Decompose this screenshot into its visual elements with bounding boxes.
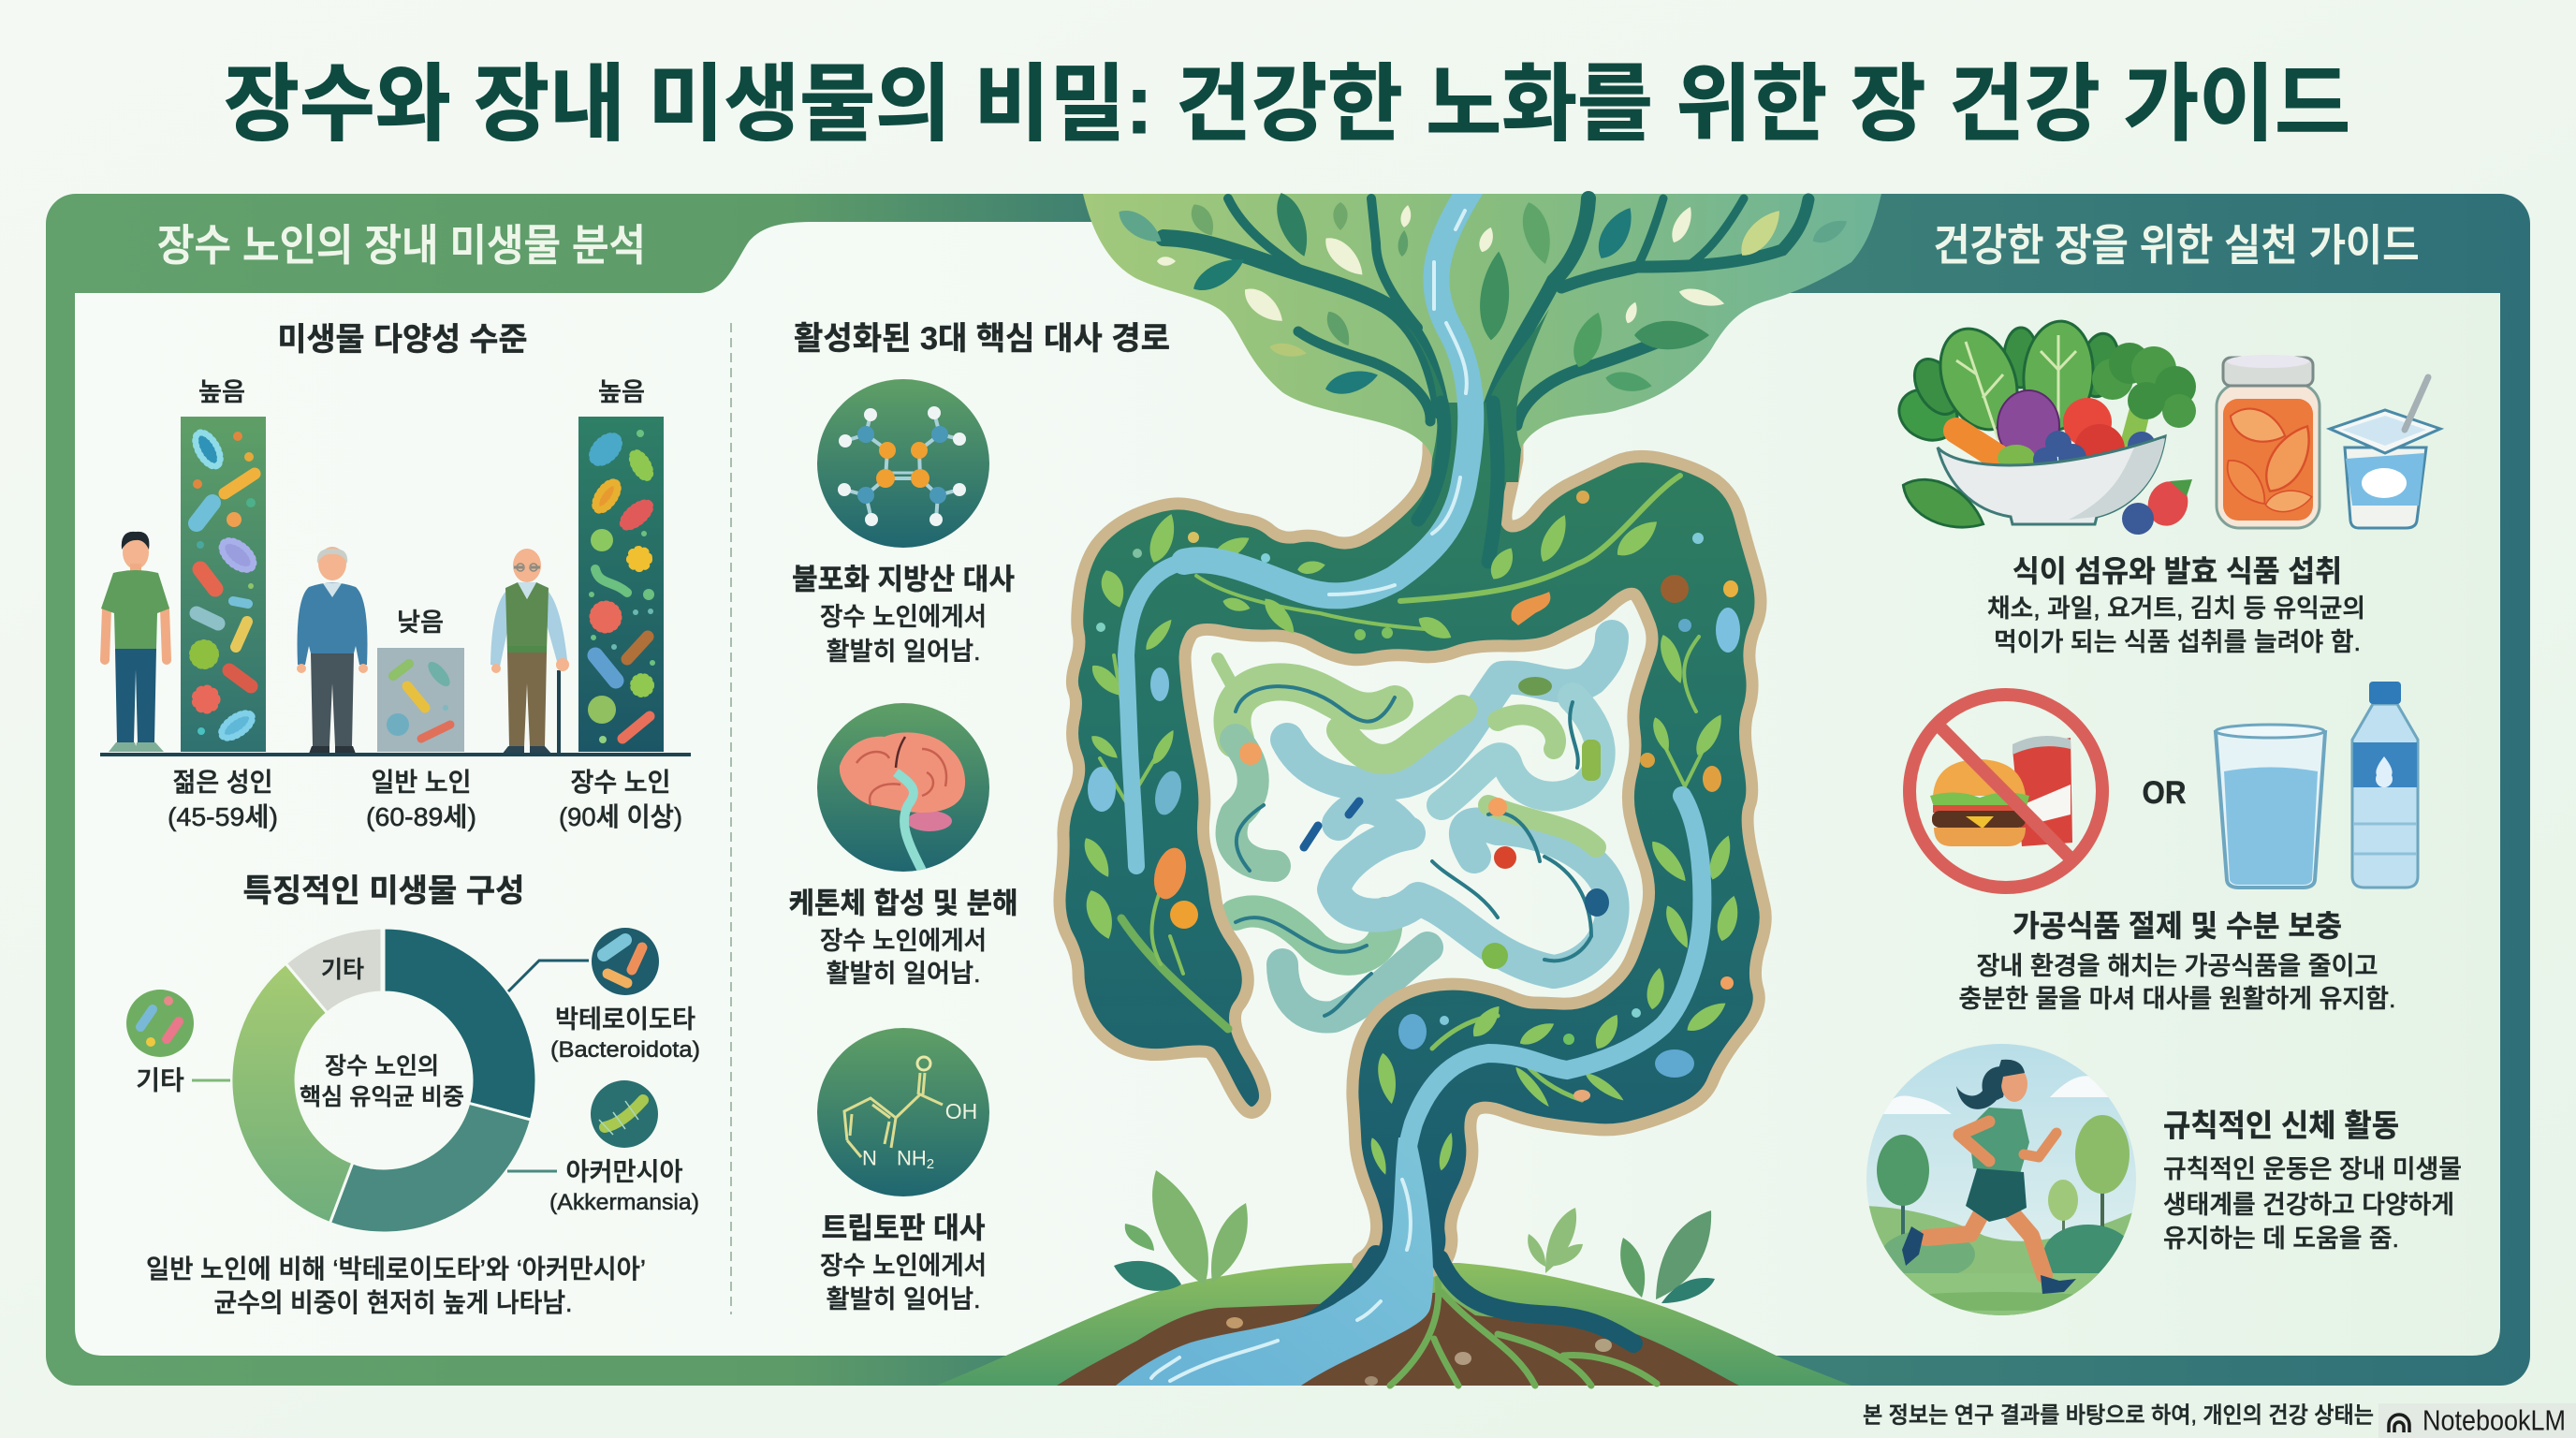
footer note: 본 정보는 연구 결과를 바탕으로 하여, 개인의 건강 상태는 — [1863, 1402, 2374, 1429]
icon: yogurt — [2330, 377, 2440, 528]
heading: fiber and fermented foods: 식이 섬유와 발효 식품 섭취 — [2012, 554, 2342, 588]
panel: three core metabolic pathways — [788, 321, 1170, 1313]
plants right — [1528, 1208, 1715, 1303]
person: young adult — [101, 532, 169, 752]
description: tryptophan: 장수 노인에게서 — [820, 1252, 987, 1280]
heading: cut processed foods: 가공식품 절제 및 수분 보충 — [2012, 909, 2342, 943]
icon: tryptophan structure: NH — [897, 1146, 927, 1170]
segment: Bacteroidota — [384, 928, 536, 1120]
label: ketone: 케톤체 합성 및 분해 — [788, 888, 1018, 919]
axis label: young adults: 젊은 성인 — [172, 768, 273, 796]
soil — [1057, 1292, 1739, 1386]
right panel header: 건강한 장을 위한 실천 가이드 — [1934, 221, 2419, 270]
axis label: general elderly: (60-89세) — [366, 801, 476, 831]
gut vines and leaves — [1078, 476, 1743, 1177]
hill — [936, 1263, 1852, 1386]
description: tryptophan: 활발히 일어남. — [826, 1285, 981, 1313]
illustration: gut tree — [936, 187, 1881, 1386]
plants left — [1114, 1170, 1248, 1291]
label: Bacteroidota: (Bacteroidota) — [550, 1037, 700, 1062]
bar: young adults — [181, 417, 266, 752]
label: tryptophan: 트립토판 대사 — [822, 1211, 985, 1245]
bar: longevity elderly — [578, 417, 664, 752]
icon: water bottle — [2352, 682, 2418, 888]
trunk upper — [1404, 309, 1549, 482]
person: longevity elderly — [490, 549, 569, 755]
label: other: 기타 — [136, 1065, 184, 1095]
label: high: 높음 — [198, 378, 245, 406]
segment: other grey — [285, 928, 382, 1013]
label: high: 높음 — [598, 378, 645, 406]
donut centre label: 핵심 유익균 비중 — [300, 1084, 464, 1110]
label: Akkermansia: (Akkermansia) — [549, 1189, 699, 1215]
segment: Akkermansia — [329, 1103, 531, 1233]
person: general elderly — [297, 547, 368, 754]
description: ketone: 장수 노인에게서 — [820, 927, 987, 955]
pebbles and roots — [1226, 1279, 1657, 1386]
heading: pathways: 활성화된 3대 핵심 대사 경로 — [794, 321, 1170, 357]
axis label: general elderly: 일반 노인 — [371, 768, 472, 796]
label: Akkermansia: 아커만시아 — [565, 1158, 683, 1186]
label: Bacteroidota: 박테로이도타 — [555, 1005, 695, 1034]
icon: brain ketone bodies — [817, 703, 989, 872]
icon: other microbes — [126, 990, 194, 1057]
crown leaves — [1113, 189, 1852, 399]
small intestine — [1218, 637, 1613, 1018]
label: or: OR — [2142, 775, 2187, 811]
donut label: other: 기타 — [321, 957, 364, 983]
trunk dark strands — [1418, 403, 1498, 562]
axis label: longevity elderly: (90세 이상) — [559, 801, 682, 831]
donut centre label: 장수 노인의 — [325, 1053, 439, 1079]
description: fatty acid: 장수 노인에게서 — [820, 603, 987, 631]
icon: salad bowl — [1891, 317, 2196, 541]
axis label: longevity elderly: 장수 노인 — [571, 768, 670, 796]
label: low: 낮음 — [397, 609, 444, 637]
label: fatty acid: 불포화 지방산 대사 — [792, 564, 1015, 595]
icon: tryptophan structure — [817, 1028, 989, 1196]
description: processed foods: 충분한 물을 마셔 대사를 원활하게 유지함. — [1958, 985, 2396, 1013]
baseline — [100, 753, 691, 756]
icon: Bacteroidota — [592, 928, 659, 995]
large intestine trunk — [1060, 445, 1765, 1273]
heading: composition: 특징적인 미생물 구성 — [243, 873, 524, 909]
panel: practice guide — [1863, 221, 2462, 1320]
icon: unsaturated fatty acid molecule — [817, 379, 989, 548]
title: 장수와 장내 미생물의 비밀: 건강한 노화를 위한 장 건강 가이드 — [224, 58, 2350, 152]
axis label: young adults: (45-59세) — [168, 801, 278, 831]
dark root band — [1287, 1255, 1633, 1343]
tree crown — [1083, 194, 1881, 459]
icon: no processed food — [1910, 695, 2102, 888]
icon: tryptophan structure: OH — [945, 1099, 977, 1123]
water stream — [1126, 187, 1702, 1184]
caption: composition: 일반 노인에 비해 ‘박테로이도타’와 ‘아커만시아’ — [146, 1255, 646, 1283]
icon: kimchi jar — [2217, 355, 2321, 528]
bar: general elderly — [377, 648, 464, 752]
leader: Akkermansia — [507, 1170, 557, 1172]
description: processed foods: 장내 환경을 해치는 가공식품을 줄이고 — [1977, 952, 2378, 980]
donut chart — [231, 928, 536, 1233]
icon: Akkermansia — [591, 1080, 658, 1148]
icon: tryptophan structure: 2 — [927, 1155, 934, 1172]
panel: longevity microbiome analysis — [100, 221, 700, 1316]
icon: tryptophan structure: N — [862, 1146, 877, 1170]
leafy greens — [1891, 317, 2124, 449]
diversity bar chart — [100, 378, 691, 831]
icon: runner — [1863, 1044, 2144, 1320]
leader: other — [192, 1078, 230, 1082]
crown branches — [1164, 198, 1808, 425]
description: fiber: 먹이가 되는 식품 섭취를 늘려야 함. — [1994, 628, 2361, 656]
description: physical activity: 생태계를 건강하고 다양하게 — [2163, 1191, 2454, 1219]
segment: other green — [231, 963, 353, 1223]
description: physical activity: 유지하는 데 도움을 줌. — [2163, 1225, 2399, 1253]
left panel header: 장수 노인의 장내 미생물 분석 — [157, 221, 646, 270]
leader: Bacteroidota — [508, 961, 589, 991]
panel frame — [46, 194, 2530, 1386]
caption: composition: 균수의 비중이 현저히 높게 나타남. — [213, 1288, 573, 1316]
bowl — [1938, 436, 2165, 524]
broccoli — [2092, 343, 2196, 461]
icon: glass of water — [2216, 725, 2325, 888]
heading: physical activity: 규칙적인 신체 활동 — [2163, 1108, 2399, 1142]
description: ketone: 활발히 일어남. — [826, 960, 981, 988]
water pool — [1116, 1137, 1433, 1386]
description: physical activity: 규칙적인 운동은 장내 미생물 — [2163, 1155, 2462, 1183]
description: fiber: 채소, 과일, 요거트, 김치 등 유익균의 — [1987, 594, 2365, 623]
description: fatty acid: 활발히 일어남. — [826, 638, 981, 666]
heading: diversity level: 미생물 다양성 수준 — [277, 322, 528, 358]
